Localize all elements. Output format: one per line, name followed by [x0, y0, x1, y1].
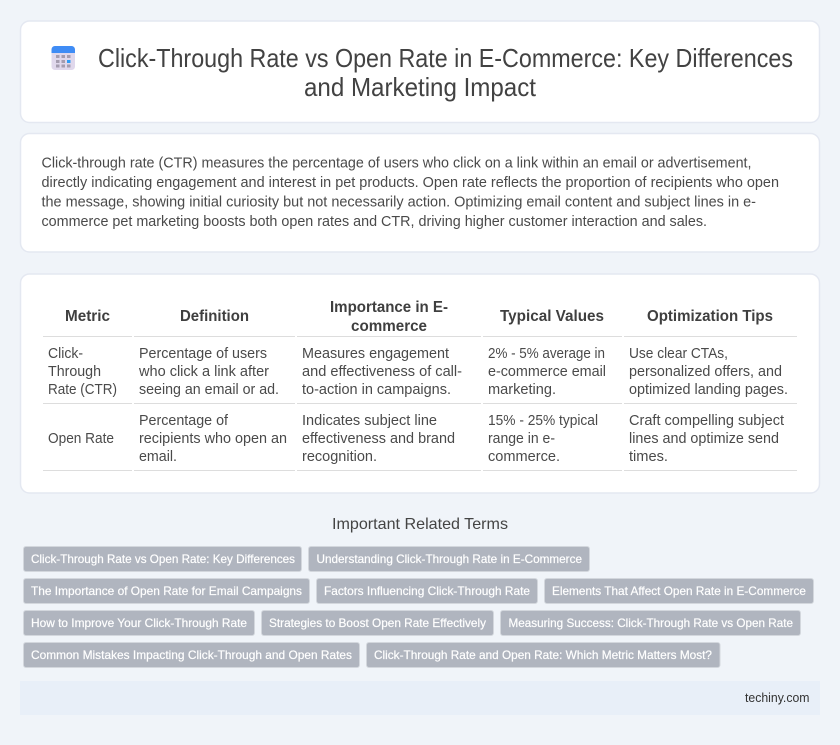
table row: click-through rate: Through: [48, 364, 101, 380]
tag row 3: Measuring Success: Click-Through Rate vs Open Rate: [508, 616, 793, 630]
table header row: [65, 299, 773, 335]
table row: open rate: lines and optimize send: [629, 431, 779, 447]
table row: open rate: effectiveness and brand: [302, 431, 455, 447]
table header row: Importance in E-: [330, 299, 448, 316]
tag row 3: [24, 610, 800, 636]
tag row 1: Click-Through Rate vs Open Rate: Key Differences: [31, 552, 295, 566]
table row: open rate: recognition.: [302, 449, 377, 465]
panel: title header: [20, 21, 820, 122]
text block: summary: the message, showing initial curiosity but not necessarily action. Optimizing email content and subject lines in e-: [42, 194, 756, 210]
tag list: related terms: [24, 546, 814, 668]
icon: calendar: [52, 46, 75, 70]
tag row 2: Factors Influencing Click-Through Rate: [324, 584, 530, 598]
tag row 2: Elements That Affect Open Rate in E-Commerce: [552, 584, 806, 598]
table header row: Definition: [180, 308, 249, 325]
table row: click-through rate: optimized landing pages.: [629, 382, 788, 398]
tag row 3: Strategies to Boost Open Rate Effectively: [269, 616, 486, 630]
table row: click-through rate: seeing an email or ad.: [139, 382, 279, 398]
table row: click-through rate: to-action in campaigns.: [302, 382, 451, 398]
title: [98, 45, 793, 102]
text block: summary: commerce pet marketing boosts both open rates and CTR, driving higher customer interaction and sales.: [42, 214, 707, 230]
table row: open rate: Craft compelling subject: [629, 413, 784, 429]
text block: summary: [42, 156, 779, 230]
footer: techiny.com: [745, 690, 810, 705]
table row rules: [43, 336, 797, 470]
text block: summary: Click-through rate (CTR) measures the percentage of users who click on a link within an email or advertisement,: [42, 156, 752, 172]
table row: click-through rate: who click a link after: [138, 364, 269, 380]
table row: open rate: Percentage of: [139, 413, 229, 429]
panel: comparison table: [20, 274, 820, 493]
table row: open rate: [48, 413, 784, 465]
table header row: Typical Values: [500, 308, 604, 325]
table row: click-through rate: Measures engagement: [302, 346, 449, 362]
table row: click-through rate: Percentage of users: [139, 346, 267, 362]
table row: open rate: email.: [139, 449, 177, 465]
table header row: commerce: [351, 318, 427, 335]
table row: click-through rate: 2% - 5% average in: [488, 346, 605, 362]
table header row: Metric: [65, 308, 110, 325]
table header row: Optimization Tips: [647, 308, 773, 325]
title: Click-Through Rate vs Open Rate in E-Commerce: Key Differences: [98, 45, 793, 73]
table row: click-through rate: Use clear CTAs,: [629, 346, 728, 362]
tag row 4: Click-Through Rate and Open Rate: Which Metric Matters Most?: [374, 648, 712, 662]
heading: important related terms: Important Related Terms: [332, 516, 508, 533]
title: and Marketing Impact: [304, 74, 536, 102]
panel: summary paragraph: [20, 134, 820, 252]
tag row 4: Common Mistakes Impacting Click-Through and Open Rates: [31, 648, 352, 662]
table row: open rate: 15% - 25% typical: [488, 413, 598, 429]
table row: open rate: Indicates subject line: [302, 413, 437, 429]
tag row 2: The Importance of Open Rate for Email Campaigns: [31, 584, 302, 598]
tag row 1: Understanding Click-Through Rate in E-Commerce: [316, 552, 582, 566]
tag row 4: [24, 642, 720, 668]
table row: click-through rate: and effectiveness of call-: [302, 364, 462, 380]
footer: [20, 681, 820, 715]
tag row 1: [24, 546, 590, 572]
table row: click-through rate: e-commerce email: [488, 364, 606, 380]
tag row 2: [24, 578, 814, 604]
table row: click-through rate: [48, 346, 788, 398]
table row: open rate: recipients who open an: [139, 431, 287, 447]
table row: open rate: commerce.: [488, 449, 560, 465]
table row: click-through rate: Rate (CTR): [48, 382, 117, 398]
text block: summary: directly indicating engagement and interest in pet products. Open rate reflects the proportion of recipients who open: [42, 175, 779, 191]
table row: open rate: range in e-: [488, 431, 555, 447]
table row: open rate: times.: [629, 449, 668, 465]
table row: click-through rate: Click-: [48, 346, 83, 362]
table row: open rate: Open Rate: [48, 431, 114, 447]
table row: click-through rate: personalized offers, and: [629, 364, 782, 380]
tag row 3: How to Improve Your Click-Through Rate: [31, 616, 247, 630]
table row: click-through rate: marketing.: [488, 382, 556, 398]
